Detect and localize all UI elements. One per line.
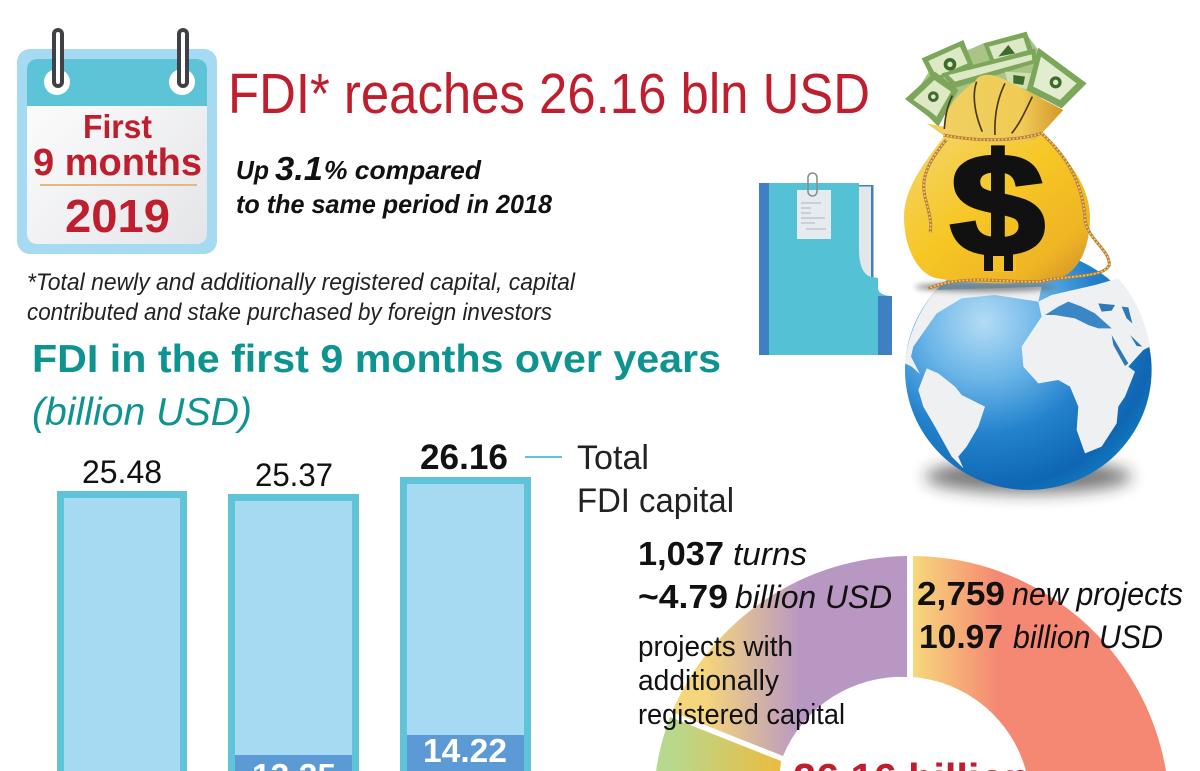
bar: second year (228, 457, 359, 771)
icon: money bag body (904, 133, 1090, 283)
growth statement (236, 150, 553, 219)
icon: money bills (905, 32, 1087, 127)
footnote: *Total newly and additionally registered capital, capital (27, 269, 576, 296)
label: additional capital: 1,037 (638, 535, 724, 572)
label: new projects: billion USD (1013, 619, 1163, 655)
bar: first year (57, 454, 187, 771)
legend: total FDI capital (525, 439, 734, 520)
growth statement: 3.1 (275, 150, 323, 187)
calendar icon: 9 months (33, 142, 202, 184)
chart heading (32, 338, 721, 434)
growth statement: % compared (324, 155, 482, 185)
label: new projects (917, 575, 1183, 655)
calendar icon: First (83, 108, 152, 145)
bar: third year (400, 438, 531, 771)
label: additional capital: billion USD (735, 579, 892, 615)
chart heading: FDI in the first 9 months over years (32, 338, 721, 381)
icon: globe (905, 250, 1152, 493)
segment: stake purchases (656, 717, 781, 771)
donut chart (656, 556, 1166, 771)
label: new projects: 10.97 (919, 618, 1003, 655)
legend: total FDI capital: FDI capital (577, 482, 734, 520)
icon: dollar sign: $ (950, 124, 1045, 286)
legend: total FDI capital: Total (577, 439, 649, 477)
growth statement: Up (236, 155, 269, 185)
icon: folder (759, 173, 892, 355)
label: additional capital: additionally (638, 665, 779, 697)
chart heading: (billion USD) (32, 391, 252, 434)
calendar icon: 2019 (65, 190, 170, 242)
icon: bag rope (924, 133, 1109, 288)
bag shadow on globe (915, 282, 1055, 292)
footnote (27, 269, 576, 326)
label: new projects: new projects (1012, 576, 1183, 612)
label: additional capital: ~4.79 (638, 578, 728, 615)
calendar icon (17, 30, 217, 254)
label: additional capital: turns (733, 536, 807, 572)
label: new projects: 2,759 (917, 575, 1005, 612)
title: FDI* reaches 26.16 bln USD (228, 62, 870, 126)
icon: money bag top (927, 75, 1063, 143)
label: additional capital (638, 535, 892, 731)
bar: second year: 25.37 (255, 457, 333, 493)
bar: third year: 14.22 (423, 732, 507, 769)
segment: new projects (913, 556, 1166, 771)
bar chart (57, 438, 531, 771)
segment: additional capital (672, 556, 907, 756)
growth statement: to the same period in 2018 (236, 189, 553, 219)
label: additional capital: projects with (638, 631, 793, 663)
label: additional capital: registered capital (638, 699, 845, 731)
footnote: contributed and stake purchased by foreign investors (27, 299, 552, 326)
bar: first year: 25.48 (82, 454, 162, 490)
bar: third year: 26.16 (420, 438, 508, 477)
